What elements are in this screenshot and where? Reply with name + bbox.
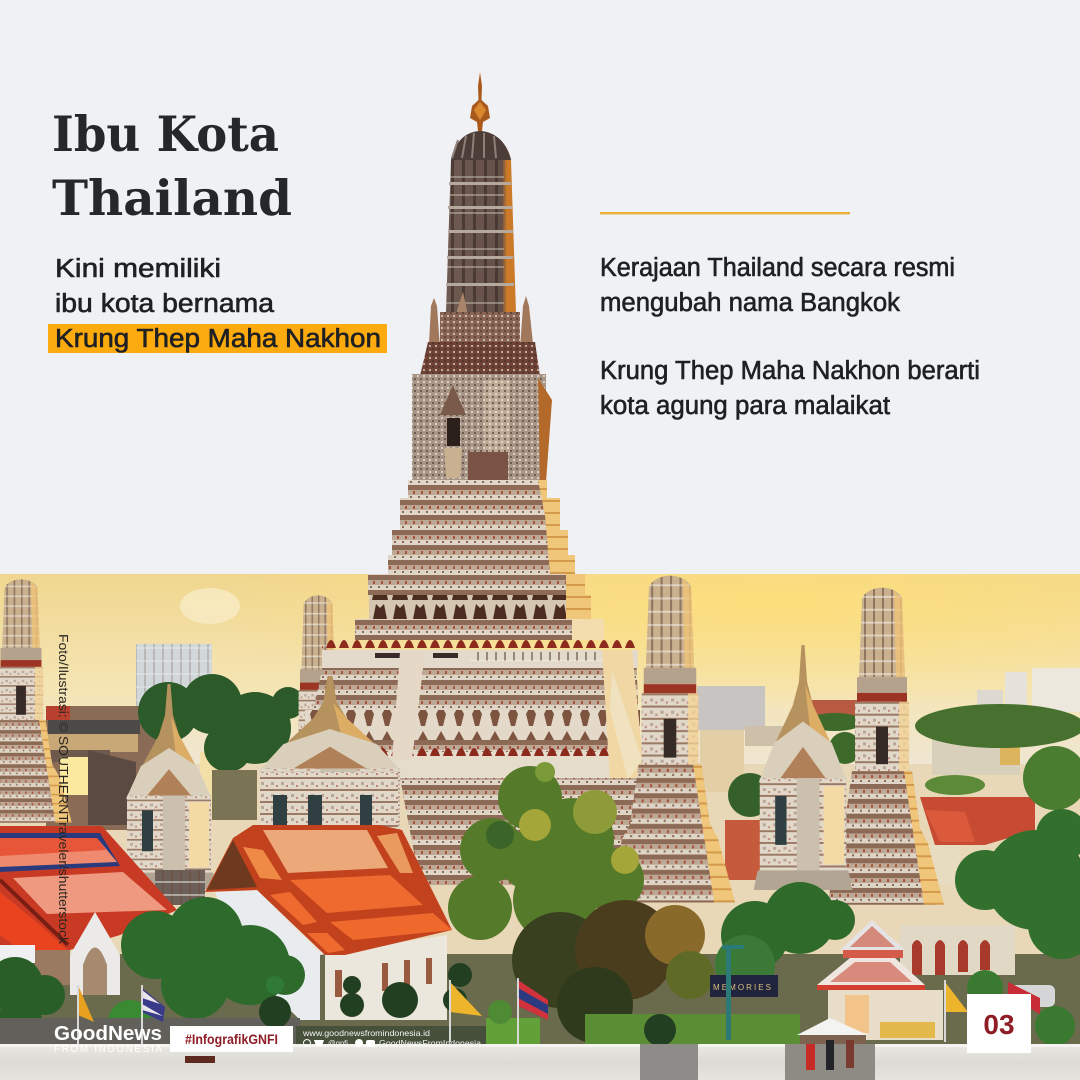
orange roofs [0, 825, 452, 1020]
shaded strip behind links [296, 1026, 486, 1044]
highlighted name: Krung Thep Maha Nakhon [55, 325, 381, 353]
right text block [600, 254, 980, 420]
right text block: kota agung para malaikat [600, 392, 890, 420]
social links: GoodNewsFromIndonesia [379, 1038, 481, 1048]
ornamental shrubs [259, 963, 1075, 1046]
centre prang [613, 576, 735, 902]
sign board: MEMORIES [713, 983, 771, 992]
lawn [486, 1014, 800, 1044]
mondop centre [250, 676, 410, 846]
left green tree [0, 897, 305, 1044]
temple foot [300, 778, 640, 885]
right text block: Krung Thep Maha Nakhon berarti [600, 357, 980, 385]
social links: www.goodnewsfromindonesia.id [302, 1028, 430, 1038]
lower dark tree [512, 900, 714, 1043]
left prang [0, 579, 72, 823]
centre roof [205, 825, 452, 1020]
page number: 03 [983, 1009, 1015, 1040]
sky [0, 574, 1080, 764]
steps [155, 870, 205, 905]
large tree [448, 762, 644, 942]
photo credit: Foto/Ilustrasi: © SOUTHERNTraveler/shutterstock [56, 634, 71, 945]
left roof [0, 826, 177, 995]
foreground trees [0, 762, 1080, 1044]
flags [77, 978, 1040, 1045]
right green tree [715, 882, 855, 995]
highlight bar [48, 324, 387, 353]
left text block [48, 255, 387, 353]
mondop right [754, 645, 852, 890]
pavement [0, 1018, 300, 1044]
logo [54, 1023, 162, 1055]
title [52, 105, 292, 227]
far right tree and wall [900, 809, 1080, 1007]
upper spire [446, 131, 516, 312]
sign board [710, 975, 778, 997]
right text block: mengubah nama Bangkok [600, 289, 900, 317]
mondop left [121, 684, 217, 889]
embankment wall [0, 1040, 1080, 1080]
right prang [828, 588, 944, 905]
main body [298, 638, 645, 785]
title: Ibu Kota [52, 105, 279, 163]
footer branding [54, 1023, 481, 1055]
page number [967, 994, 1031, 1053]
logo: GoodNews [54, 1023, 162, 1045]
distant buildings [46, 644, 1080, 885]
social links [302, 1028, 481, 1048]
social links: @gnfi [328, 1038, 348, 1048]
background trees [138, 674, 1080, 820]
title: Thailand [52, 169, 292, 227]
side prang, back left [279, 595, 363, 858]
lower tier with figures [355, 574, 604, 640]
logo: FROM INDONESIA [54, 1044, 162, 1055]
hashtag [170, 1026, 293, 1052]
hashtag: #InfografikGNFI [185, 1032, 278, 1047]
prangs and mondops [0, 576, 944, 905]
middle tier with niche [412, 374, 552, 482]
temple central tower [298, 72, 645, 885]
pavilion [722, 920, 943, 1045]
accent line [600, 212, 850, 214]
left text block: ibu kota bernama [55, 290, 275, 318]
ground base [0, 764, 1080, 1044]
photo: Wat Arun temple scene [0, 574, 1080, 1044]
stepped tiers [388, 480, 575, 574]
temple grounds [0, 920, 1080, 1080]
left text block: Kini memiliki [55, 255, 221, 283]
right text block: Kerajaan Thailand secara resmi [600, 254, 955, 282]
crown section [420, 292, 540, 376]
finial [470, 72, 490, 131]
